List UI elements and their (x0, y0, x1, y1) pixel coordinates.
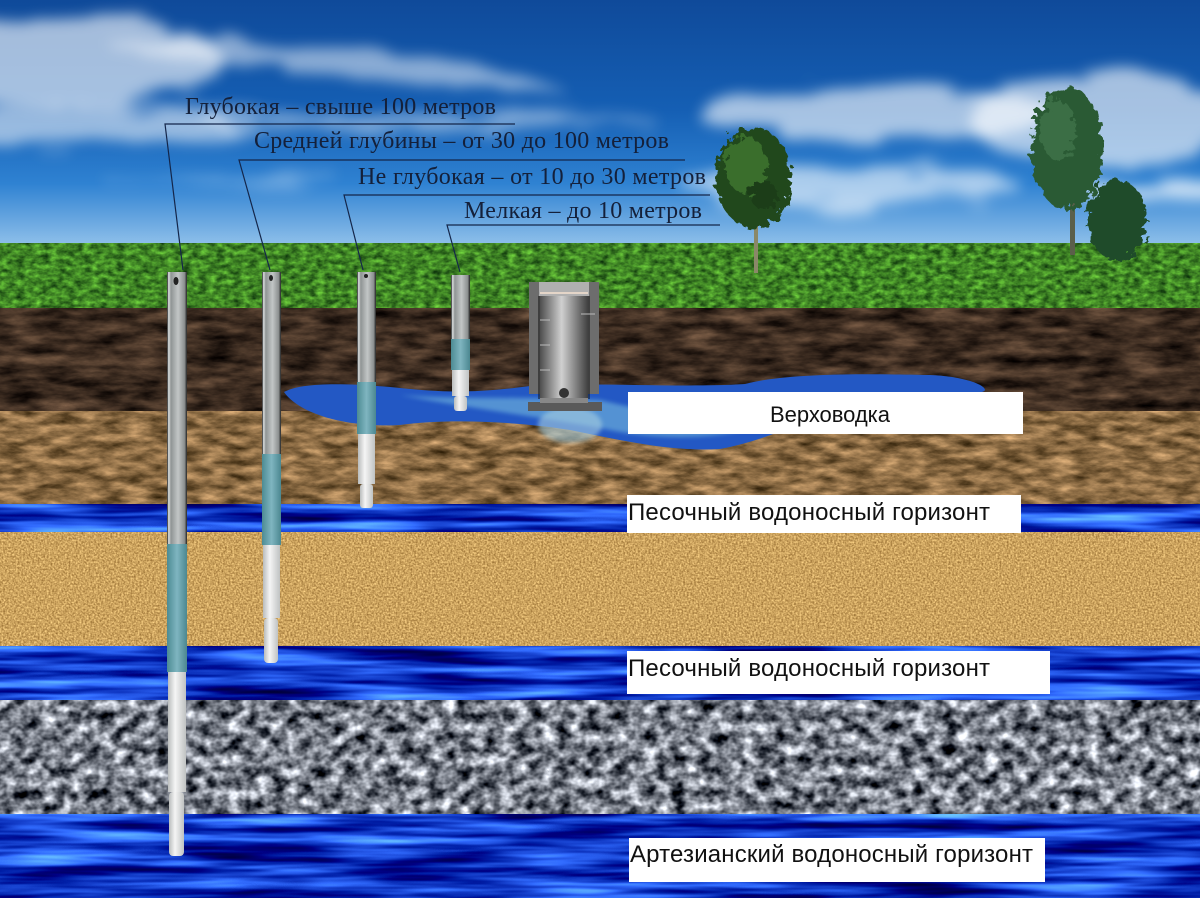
label box: artesian aquifer (629, 838, 1045, 882)
layer: granite (0, 700, 1200, 815)
trees: right pair (1031, 86, 1147, 260)
sky with clouds (0, 0, 1200, 245)
depth label: shallow: Не глубокая – от 10 до 30 метров (358, 164, 706, 190)
dug well with concrete rings (528, 282, 602, 411)
layer: dark soil (0, 308, 1200, 412)
label box: perched water: Верховодка (770, 402, 891, 427)
label box: sand aquifer 2: Песочный водоносный горизонт (628, 655, 990, 682)
label box: sand aquifer 2 (627, 651, 1050, 694)
label box: perched water (628, 392, 1023, 434)
depth label: small: Мелкая – до 10 метров (464, 198, 702, 224)
layer: middle aquifer (0, 646, 1200, 701)
label box: artesian aquifer: Артезианский водоносный горизонт (630, 841, 1033, 868)
label box: sand aquifer 1: Песочный водоносный горизонт (628, 499, 990, 526)
layer: grass (0, 243, 1200, 309)
leader lines (165, 124, 720, 272)
layer: brown sandy soil (0, 411, 1200, 506)
well: medium (262, 272, 281, 663)
well: deep (167, 272, 187, 856)
label box: sand aquifer 1 (627, 495, 1021, 533)
well: small (451, 275, 470, 411)
perched water lens (284, 374, 985, 449)
layer: artesian aquifer (0, 814, 1200, 898)
well: shallow (357, 272, 376, 508)
layer: sand (0, 532, 1200, 647)
depth label: medium: Средней глубины – от 30 до 100 метров (254, 128, 669, 154)
tree: centre (716, 128, 792, 273)
depth label: deep: Глубокая – свыше 100 метров (185, 94, 496, 120)
layer: upper aquifer (0, 504, 1200, 533)
